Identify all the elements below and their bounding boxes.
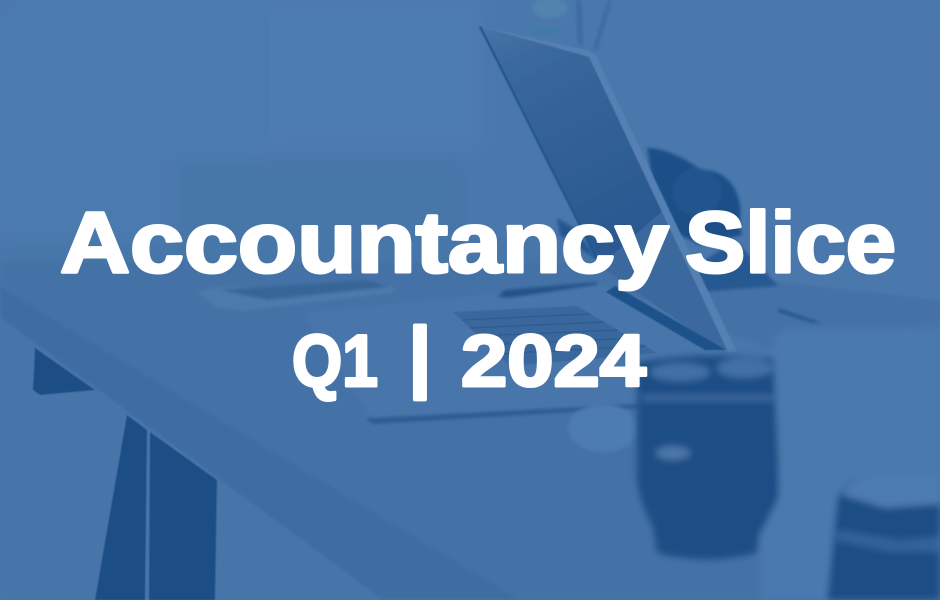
plant stems on back shelf — [576, 0, 583, 45]
mouse — [568, 404, 638, 452]
title: Slice — [685, 195, 896, 291]
reflected keyboard and bezel — [600, 207, 733, 350]
laptop base shadow — [366, 402, 640, 424]
phone — [198, 287, 396, 311]
cable — [497, 282, 597, 298]
title: Accountancy — [60, 195, 669, 291]
lid edge — [479, 26, 737, 352]
subtitle: | — [409, 311, 431, 399]
desk front edge — [0, 287, 520, 600]
shadow behind lid — [557, 218, 600, 262]
keyboard — [453, 306, 657, 366]
subtitle — [292, 311, 646, 402]
laptop base — [303, 284, 780, 418]
wall lower left — [0, 318, 382, 600]
keyboard key rows — [462, 314, 646, 354]
desk leg — [95, 415, 147, 600]
desk top surface — [0, 262, 940, 600]
subtitle: Q1 — [292, 321, 378, 402]
white cup — [760, 327, 940, 600]
wristpad mark — [778, 308, 822, 323]
desk bracket — [33, 348, 95, 395]
subtitle: 2024 — [461, 321, 646, 402]
small lens on right — [827, 473, 940, 600]
headphones — [647, 148, 742, 245]
laptop screen — [479, 27, 667, 266]
lens mug — [637, 355, 780, 560]
title — [60, 195, 896, 291]
